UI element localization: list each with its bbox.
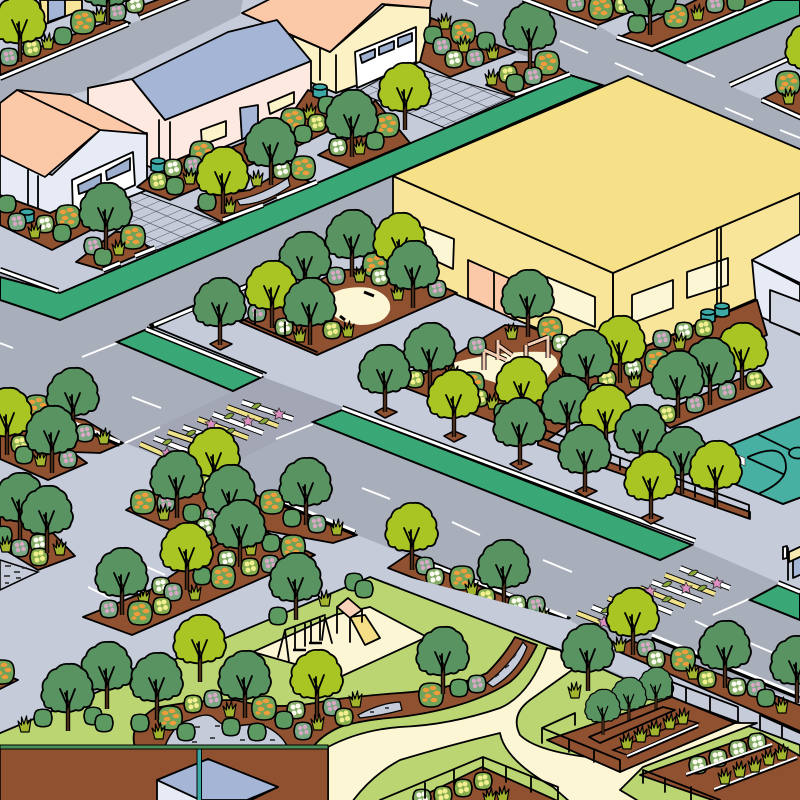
panel: light sidewalk band — [400, 575, 800, 750]
tree — [25, 406, 78, 473]
tree — [160, 523, 213, 590]
tree — [213, 500, 266, 567]
swing set — [278, 615, 332, 662]
garage door — [72, 152, 135, 213]
rain gardens — [237, 178, 290, 205]
panel: community garden C — [380, 757, 560, 800]
tree — [715, 323, 768, 390]
bed — [589, 707, 675, 743]
tree — [290, 650, 343, 717]
panel: top-left planter — [0, 0, 190, 78]
tree — [501, 270, 554, 337]
tree — [683, 338, 736, 405]
play area — [452, 352, 560, 393]
tree — [173, 615, 226, 682]
panel: central planter cluster — [83, 428, 357, 635]
shrubs — [248, 253, 446, 342]
panel: roadside planter east — [561, 588, 800, 732]
shrubs — [776, 71, 800, 104]
shrubs — [0, 13, 559, 266]
sidewalk fence — [672, 682, 800, 738]
tree — [0, 388, 33, 455]
tree — [244, 118, 297, 185]
tree — [279, 458, 332, 525]
crosswalk 2 — [577, 568, 730, 628]
small tree — [638, 667, 674, 713]
panel: park mulch bed — [18, 553, 581, 747]
right wall — [613, 193, 800, 360]
fence — [380, 757, 558, 800]
panel: community garden B — [640, 733, 800, 800]
tree — [325, 210, 378, 277]
shrubs — [131, 475, 343, 536]
panel: house planters — [0, 2, 570, 270]
shrubs — [613, 636, 788, 713]
fence — [643, 770, 720, 800]
roof — [88, 20, 311, 120]
panel: yellow school building — [393, 76, 800, 360]
driveway pavers left — [115, 188, 222, 250]
tree — [558, 425, 611, 497]
lower strip — [655, 370, 772, 428]
driveway pavers right — [357, 65, 513, 128]
panel: lower left sidewalk — [0, 440, 570, 733]
door — [240, 105, 258, 140]
shrubs — [11, 395, 110, 468]
panel: roadside planter — [385, 503, 570, 628]
tree — [503, 2, 556, 69]
tree — [493, 398, 546, 470]
tree — [561, 624, 614, 691]
windows — [423, 227, 728, 327]
tree — [95, 548, 148, 615]
left wall — [393, 176, 613, 360]
tree — [358, 345, 411, 418]
tree — [203, 465, 256, 532]
tree — [623, 0, 676, 35]
crossing band — [125, 377, 343, 480]
tree — [495, 357, 548, 424]
garage door — [355, 27, 416, 88]
plants — [718, 744, 788, 784]
tree — [150, 451, 203, 518]
rain barrels — [20, 84, 327, 223]
raised beds — [686, 744, 797, 790]
roof — [242, 0, 432, 52]
panel: house 1 white with peach roof — [0, 90, 147, 228]
window — [268, 92, 294, 114]
shrubs — [567, 0, 745, 33]
rock basin — [165, 715, 287, 746]
house at top edge — [40, 0, 82, 25]
panel: park grass — [0, 577, 800, 800]
bike lane strip 3 — [750, 585, 800, 620]
tree — [0, 0, 46, 62]
walking path — [328, 648, 757, 800]
panel: underground section — [0, 745, 328, 800]
play structure — [484, 336, 548, 370]
tree — [541, 376, 594, 443]
tree — [378, 63, 431, 130]
shrubs — [406, 317, 764, 423]
shrubs — [18, 573, 581, 741]
panel: bike lane strip 1 — [117, 285, 266, 391]
crosswalk 1 — [140, 402, 293, 458]
street trees in squares — [358, 345, 677, 524]
tree — [80, 642, 133, 709]
panel: playground sand — [253, 598, 427, 677]
rock channel — [358, 642, 527, 718]
tree — [0, 473, 46, 540]
rock patch — [0, 560, 38, 590]
bench — [783, 546, 800, 580]
tree — [427, 370, 480, 442]
white parking lines — [88, 567, 165, 598]
tree — [624, 452, 677, 524]
small tree — [585, 689, 621, 735]
tree — [269, 553, 322, 620]
tree — [325, 90, 378, 157]
shrubs — [413, 772, 509, 800]
roof back — [17, 90, 147, 134]
tree — [579, 385, 632, 452]
roof front — [0, 90, 100, 177]
tree in square — [193, 278, 246, 350]
underground tank — [157, 759, 278, 800]
plants — [620, 708, 689, 749]
panel: basketball court — [725, 416, 800, 504]
panel: central block sidewalk — [150, 218, 800, 592]
fence strip — [538, 437, 750, 519]
tree — [698, 621, 751, 688]
panel: house 2 pink with blue roof — [88, 20, 311, 170]
tree — [130, 653, 183, 720]
slide — [350, 615, 380, 645]
tree trunk — [81, 0, 134, 25]
tree — [41, 664, 94, 731]
shrubs — [0, 526, 66, 566]
panel: white side building — [752, 233, 800, 335]
tree — [46, 368, 99, 435]
panel: top-left block sidewalk — [0, 0, 190, 78]
shrubs — [100, 534, 305, 625]
tree — [614, 405, 667, 472]
shrubs — [689, 733, 766, 774]
panel: far right block — [730, 21, 800, 120]
tree — [403, 323, 456, 390]
tree — [187, 428, 240, 495]
tree — [20, 486, 73, 553]
panel: main schoolyard planter — [403, 270, 772, 519]
panel: community garden A — [542, 667, 735, 772]
left edge shrub — [0, 660, 18, 690]
tree — [689, 441, 742, 508]
pink doors — [468, 260, 515, 320]
raised bed — [613, 720, 698, 757]
tree — [416, 627, 469, 694]
tree — [385, 503, 438, 570]
rain barrels — [701, 303, 729, 323]
tree — [196, 147, 249, 214]
tree — [593, 316, 646, 383]
tree — [278, 232, 331, 299]
tree — [79, 183, 132, 250]
tree — [373, 213, 426, 280]
tree — [651, 351, 704, 418]
panel: house 3 cream with peach roof — [242, 0, 432, 93]
tree — [785, 21, 800, 88]
bike lane — [655, 0, 800, 63]
panel: left corner planter — [0, 368, 123, 480]
panel: top right planters and bike lane — [523, 0, 800, 63]
roof — [393, 76, 800, 273]
panel: upper planter with gathering circle — [240, 210, 457, 355]
tree — [477, 540, 530, 607]
play tower — [337, 598, 362, 642]
tree — [283, 278, 336, 345]
tree — [218, 651, 271, 718]
tree — [560, 330, 613, 397]
curbs — [103, 74, 570, 270]
window — [201, 121, 226, 145]
panel: left planter 2 — [0, 473, 75, 590]
panel: green bike lane along houses — [0, 75, 602, 320]
tree — [655, 427, 708, 494]
tree — [245, 261, 298, 328]
top-left shrubs — [0, 0, 144, 66]
gathering circle — [330, 287, 390, 325]
panel: house block sidewalk — [0, 0, 602, 292]
tree — [386, 241, 439, 308]
tree — [770, 636, 800, 703]
small tree — [611, 677, 647, 723]
tree — [606, 588, 659, 655]
pipe — [197, 749, 202, 800]
fence — [542, 713, 620, 772]
panel: bike lane strip 2 — [313, 408, 800, 620]
fence — [545, 430, 749, 518]
shrubs — [416, 557, 549, 622]
